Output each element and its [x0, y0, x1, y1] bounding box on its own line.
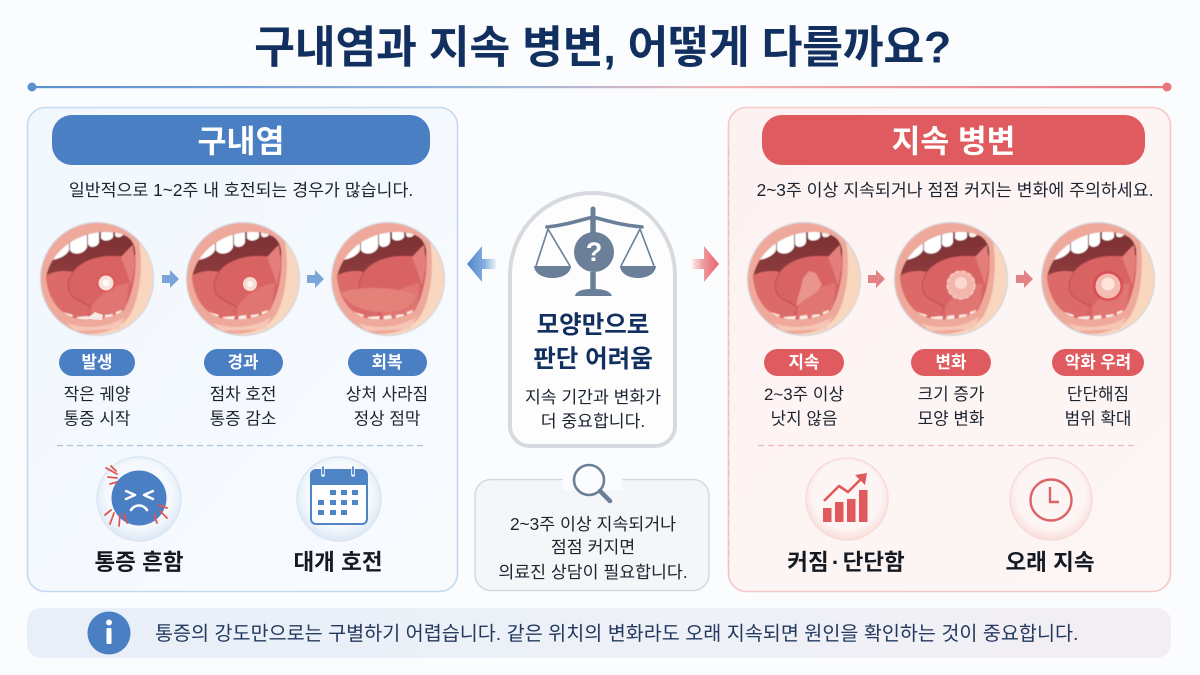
title divider: [28, 82, 1172, 92]
arrow: toward 구내염: [467, 246, 496, 282]
label: 발생: [59, 349, 135, 376]
icon: magnifier: [563, 465, 622, 501]
heading: 모양만으로: [537, 311, 649, 339]
icon: calendar: [297, 457, 381, 541]
caption: 회복: 정상 점막: [354, 410, 420, 428]
label: 변화: [911, 349, 991, 376]
heading pill: [762, 115, 1145, 165]
caption: 지속: 2~3주 이상: [764, 385, 844, 404]
label: 경과: [204, 349, 283, 376]
label: 변화: 변화: [936, 353, 966, 372]
caption: 악화 우려: 범위 확대: [1065, 410, 1131, 428]
title: 구내염과 지속 병변, 어떻게 다를까요?: [254, 24, 951, 72]
label: 지속: 지속: [789, 353, 819, 372]
illustration: 변화: [891, 219, 1011, 339]
subheading: 2~3주 이상 지속되거나 점점 커지는 변화에 주의하세요.: [757, 180, 1153, 200]
arch frame: [510, 193, 675, 446]
advice text: 점점 커지면: [551, 537, 635, 557]
illustration: 회복: [328, 219, 448, 339]
advice text: 2~3주 이상 지속되거나: [510, 514, 676, 534]
illustration: 지속: [744, 219, 864, 339]
caption: 회복: 상처 사라짐: [346, 385, 428, 404]
caption: 악화 우려: [1065, 385, 1131, 428]
arrow: [162, 270, 179, 288]
heading: [533, 311, 653, 373]
caption: 경과: 점차 호전: [210, 385, 276, 404]
caption: 회복: [346, 385, 428, 428]
panel: 구내염: [28, 108, 458, 592]
icon label: 대개 호전: 대개 호전: [293, 550, 383, 575]
label: 악화 우려: [1052, 349, 1144, 376]
caption: 발생: 작은 궤양: [64, 385, 130, 404]
label: 발생: 발생: [82, 353, 112, 372]
arrow: [307, 270, 324, 288]
panel background: [728, 108, 1170, 592]
caption: 발생: 통증 시작: [64, 410, 130, 428]
caption: 변화: [918, 385, 985, 428]
panel: medical advice: [475, 465, 709, 590]
label: 경과: 경과: [228, 353, 258, 372]
arrow: [1016, 270, 1033, 288]
panel background: [28, 108, 458, 592]
icon: balance scale: [534, 209, 656, 296]
heading pill: [52, 115, 430, 165]
label: 회복: 회복: [372, 353, 402, 372]
advice text: 의료진 상담이 필요합니다.: [498, 562, 688, 582]
advice text: [498, 514, 688, 582]
illustration: 경과: [183, 219, 303, 339]
label: 지속: [764, 349, 844, 376]
info bar: [27, 608, 1171, 658]
caption: 변화: 크기 증가: [918, 385, 985, 404]
arrow: toward 지속 병변: [692, 246, 719, 282]
note: 지속 기간과 변화가: [525, 387, 661, 407]
caption: 발생: [64, 385, 130, 428]
icon: growth chart: [806, 458, 888, 540]
caption: 경과: [210, 385, 276, 428]
icon label: 커짐·단단함: 커짐 · 단단함: [787, 550, 905, 575]
heading pill: 구내염: [198, 123, 284, 159]
label: 회복: [348, 349, 427, 376]
panel: 지속 병변: [728, 108, 1170, 592]
heading: 판단 어려움: [533, 345, 653, 373]
icon: clock: [1010, 458, 1092, 540]
subheading: 일반적으로 1~2주 내 호전되는 경우가 많습니다.: [69, 180, 413, 200]
icon label: 오래 지속: 오래 지속: [1005, 550, 1095, 575]
icon: balance scale: ?: [586, 237, 602, 267]
panel: center arch: [510, 193, 675, 446]
icon: info: [88, 612, 130, 654]
heading pill: 지속 병변: [892, 124, 1015, 159]
info text: 통증의 강도만으로는 구별하기 어렵습니다. 같은 위치의 변화라도 오래 지속되면 원인을 확인하는 것이 중요합니다.: [155, 623, 1078, 645]
icon label: 통증 흔함: 통증 흔함: [94, 550, 184, 575]
caption: 지속: 낫지 않음: [771, 410, 837, 428]
icon: pain face: [97, 457, 181, 541]
label: 악화 우려: 악화 우려: [1065, 353, 1131, 372]
caption: 변화: 모양 변화: [918, 410, 984, 428]
note: 더 중요합니다.: [541, 411, 645, 431]
caption: 악화 우려: 단단해짐: [1067, 385, 1129, 404]
illustration: 악화 우려: [1038, 219, 1158, 339]
illustration: 발생: [37, 219, 157, 339]
note: [525, 387, 661, 431]
arrow: [868, 270, 885, 288]
caption: 지속: [764, 385, 844, 428]
caption: 경과: 통증 감소: [210, 410, 276, 428]
